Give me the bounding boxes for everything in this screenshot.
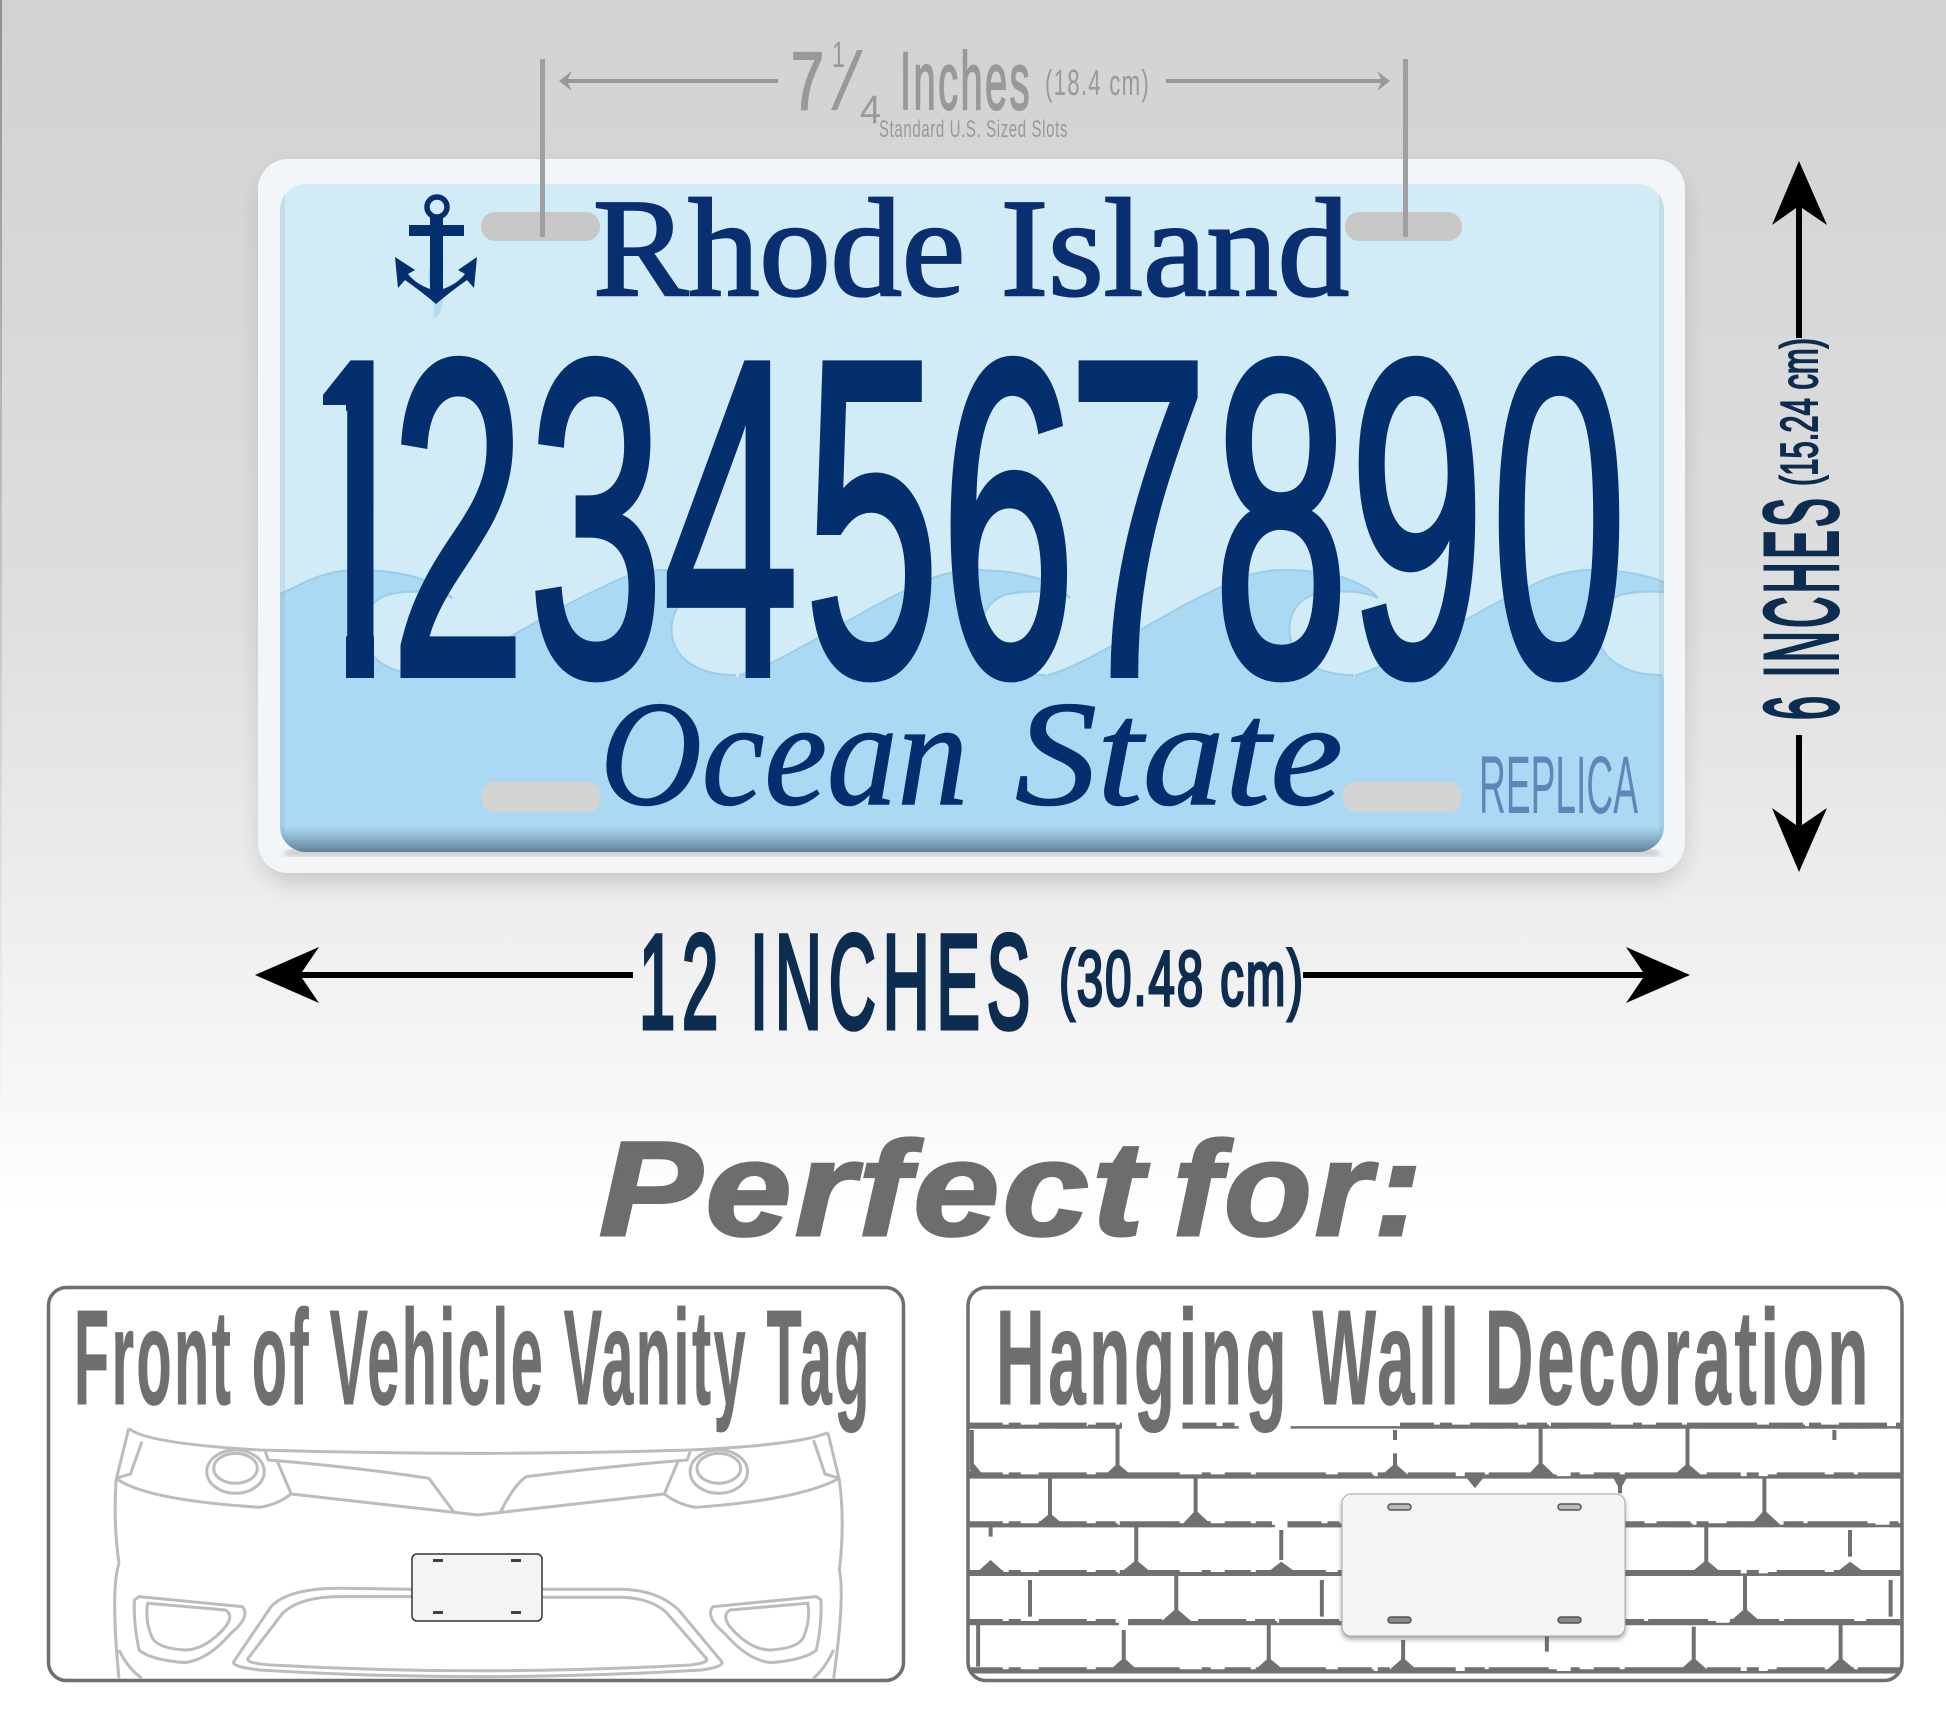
slogan bbox=[600, 671, 1343, 837]
plate slot: top left bbox=[481, 212, 600, 241]
width label: (30.48 cm) bbox=[1059, 934, 1305, 1022]
slot width label: Inches bbox=[900, 36, 1032, 127]
arrow: slot width left bbox=[559, 71, 778, 91]
plate number: 6 bbox=[940, 267, 1076, 770]
brick wall bbox=[968, 1426, 1903, 1672]
text: Front of Vehicle Vanity Tag bbox=[74, 1282, 872, 1433]
plate number: 1 bbox=[287, 266, 425, 769]
license plate bbox=[122, 159, 1686, 882]
car line drawing bbox=[115, 1428, 842, 1678]
heading: perfect for: Perfect bbox=[599, 1115, 1150, 1264]
license plate: REPLICA bbox=[1479, 740, 1638, 831]
panel: front of vehicle bbox=[48, 1282, 904, 1680]
slogan: State bbox=[1015, 671, 1343, 837]
arrow: height down bbox=[1772, 735, 1827, 872]
plate number: 2 bbox=[390, 267, 526, 770]
slot width label: 4 bbox=[860, 88, 881, 132]
slot width label bbox=[791, 34, 1150, 143]
waves bbox=[280, 569, 1664, 677]
height label: 6 INCHES bbox=[1744, 495, 1860, 720]
plate number: 9 bbox=[1349, 267, 1485, 770]
plate number: 3 bbox=[528, 267, 664, 770]
small blank plate bbox=[412, 1554, 542, 1621]
panel: hanging wall bbox=[968, 1282, 1903, 1680]
plate rim shadow bbox=[285, 851, 1659, 855]
width label: 12 INCHES bbox=[639, 908, 1037, 1057]
plate number: 4 bbox=[663, 267, 799, 770]
wall mounted blank plate bbox=[1342, 1494, 1625, 1639]
arrow: width right bbox=[1303, 947, 1690, 1003]
height label: (15.24 cm) bbox=[1771, 338, 1829, 486]
plate slot: bottom right bbox=[1343, 782, 1461, 812]
plate slot: bottom left bbox=[482, 782, 600, 812]
slot width label: Standard U.S. Sized Slots bbox=[879, 116, 1068, 143]
heading: perfect for bbox=[599, 1115, 1425, 1264]
arrow: slot width right bbox=[1166, 71, 1390, 91]
slogan: Ocean bbox=[600, 671, 968, 837]
slot width label: (18.4 cm) bbox=[1045, 62, 1150, 103]
plate number: 0 bbox=[1491, 267, 1627, 770]
plate number: 8 bbox=[1213, 267, 1349, 770]
heading: perfect for: for: bbox=[1173, 1115, 1425, 1264]
arrow: height up bbox=[1772, 161, 1827, 338]
plate slot: top right bbox=[1345, 212, 1462, 241]
slot width label: 7 bbox=[791, 36, 824, 127]
slot width label: 1 bbox=[832, 34, 845, 75]
arrow: width left bbox=[255, 947, 633, 1003]
plate number: 5 bbox=[804, 267, 940, 770]
icon: anchor bbox=[395, 197, 477, 318]
state name: Rhode Island bbox=[593, 171, 1349, 326]
plate number: 7 bbox=[1068, 268, 1208, 770]
slot spacing dimension bbox=[540, 34, 1408, 237]
plate number bbox=[323, 356, 1620, 682]
